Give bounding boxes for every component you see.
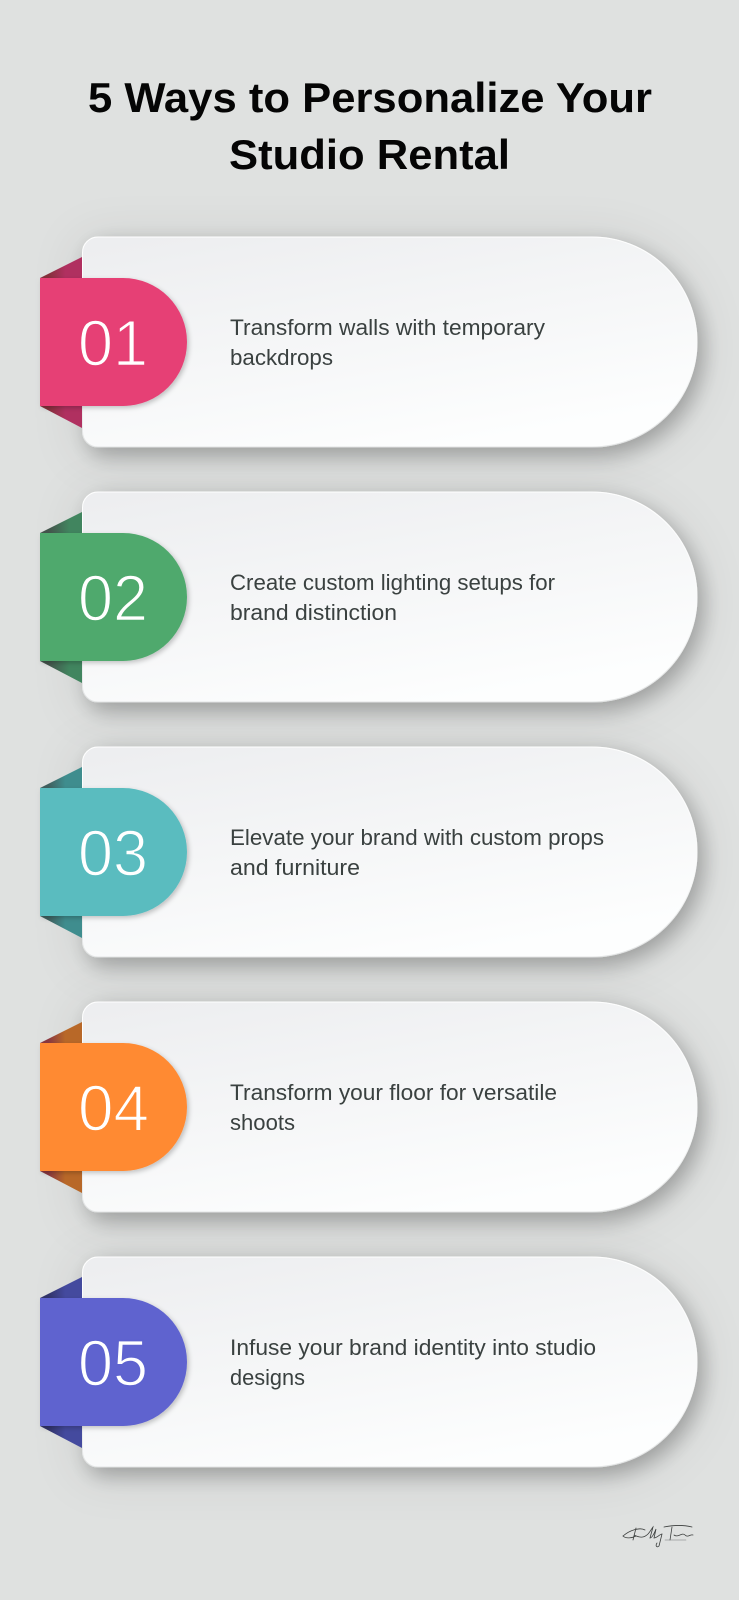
panel: step 05 [40,1257,697,1467]
text 05: designs [230,1365,305,1390]
card 01 [82,237,697,447]
number badge 03: 03 [78,816,148,890]
signature logo [623,1526,693,1547]
number badge 01: 01 [78,306,148,380]
number badge 02: 02 [78,562,148,634]
panel: step 01 [40,237,697,447]
text 01: backdrops [230,345,333,370]
title: 5 Ways to Personalize Your [88,74,652,121]
number badge 05 [40,1298,187,1426]
text 04 [230,1080,557,1135]
text 01 [230,315,545,370]
text 04: shoots [230,1110,295,1135]
number badge 04: 04 [78,1072,149,1144]
card 02 [82,492,697,702]
ribbon fold 01 [40,257,82,428]
number badge 04 [40,1043,187,1171]
text 03: and furniture [230,855,360,880]
card 05 [82,1257,697,1467]
number badge 03 [40,788,187,916]
card 03 [82,747,697,957]
text 02: brand distinction [230,600,397,625]
text 03 [230,825,604,880]
text 04: Transform your floor for versatile [230,1080,557,1105]
text 05: Infuse your brand identity into studio [230,1335,596,1360]
ribbon fold 04 [40,1022,82,1193]
text 02: Create custom lighting setups for [230,570,555,595]
text 01: Transform walls with temporary [230,315,545,340]
card 04 [82,1002,697,1212]
text 03: Elevate your brand with custom props [230,825,604,850]
number badge 01 [40,278,187,406]
text 02 [230,570,555,625]
number badge 05: 05 [78,1326,148,1400]
ribbon fold 05 [40,1277,82,1448]
panel: step 02 [40,492,697,702]
text 05 [230,1335,596,1390]
title: Studio Rental [229,131,510,178]
ribbon fold 02 [40,512,82,683]
ribbon fold 03 [40,767,82,938]
panel: step 03 [40,747,697,957]
number badge 02 [40,533,187,661]
title [88,74,652,178]
panel: step 04 [40,1002,697,1212]
